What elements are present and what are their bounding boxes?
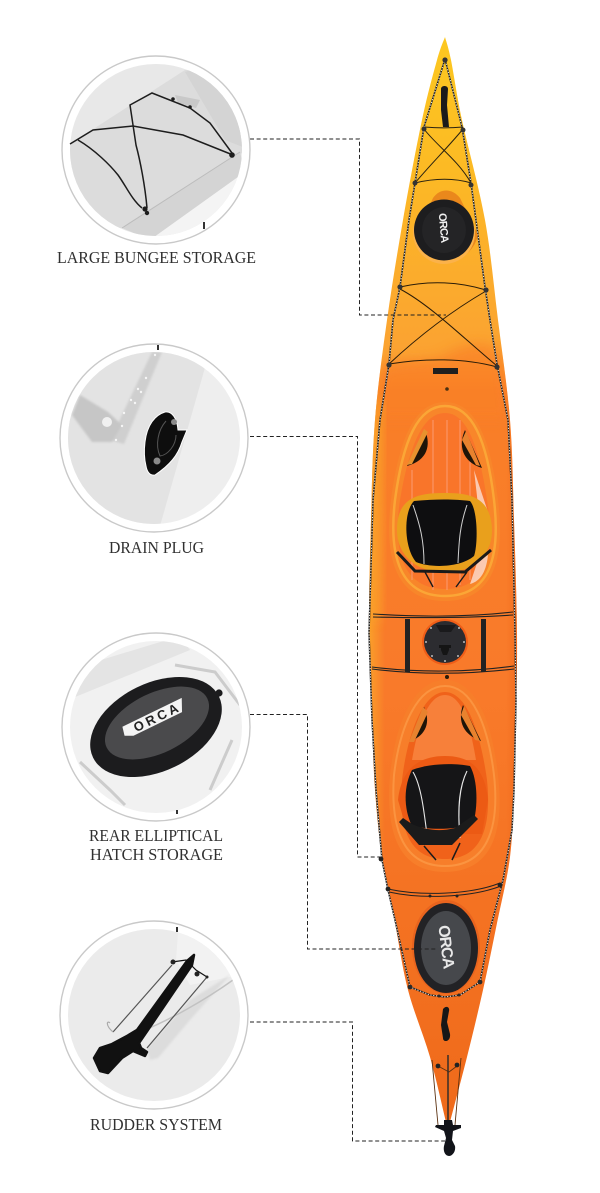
mid bungee net <box>389 283 497 367</box>
bungee fittings <box>142 97 235 215</box>
kayak <box>368 37 518 1156</box>
rudder blade <box>94 955 194 1073</box>
panel: large bungee storage <box>57 56 256 267</box>
central straps <box>405 619 486 672</box>
label: line 2: HATCH STORAGE <box>90 845 223 864</box>
infographic canvas <box>57 37 518 1156</box>
drain plug fitting <box>144 412 187 475</box>
rear hatch fittings <box>408 980 482 998</box>
black seat pad <box>406 764 476 829</box>
kayak hull <box>368 37 518 1120</box>
yellow seat shell <box>397 493 492 572</box>
dashed connector: drain plug <box>250 436 382 857</box>
rear handle <box>441 1007 450 1041</box>
rudder cables <box>107 960 207 1048</box>
mid bungee fittings <box>386 284 500 370</box>
seat piping <box>413 505 467 564</box>
rudder cables <box>432 1055 461 1125</box>
rear cockpit <box>389 680 500 872</box>
panel: rudder system <box>60 921 248 1134</box>
rudder fittings <box>170 960 208 978</box>
panel: drain plug <box>60 344 248 557</box>
seat straps <box>399 815 478 860</box>
dashed connector: rudder <box>250 1022 445 1141</box>
rear elliptical hatch <box>412 900 480 994</box>
central round hatch <box>422 619 468 665</box>
seat shell <box>398 756 488 834</box>
front bungee fittings <box>412 57 474 188</box>
circle frame <box>62 56 250 244</box>
cockpit rim <box>389 680 500 872</box>
label: LARGE BUNGEE STORAGE <box>57 248 256 267</box>
hatch lid: ORCA <box>131 700 181 735</box>
circle frame <box>60 344 248 532</box>
deck slot <box>433 368 458 374</box>
foot brace left <box>411 707 427 741</box>
seat piping <box>413 771 467 843</box>
central bungee lines <box>372 612 514 673</box>
seat straps <box>397 550 491 587</box>
rudder <box>435 1120 461 1156</box>
perimeter deck line <box>369 59 516 997</box>
dashed connector: rear hatch <box>250 714 437 949</box>
rear bungee fittings <box>379 857 502 898</box>
foot brace left <box>407 430 428 466</box>
front round hatch: ORCA <box>436 213 450 244</box>
foot brace right <box>462 430 482 468</box>
dashed connector: bungee <box>250 139 446 315</box>
black seat pad <box>406 500 477 566</box>
bungee cords <box>70 93 233 208</box>
hatch lid <box>74 657 238 797</box>
front cockpit <box>389 402 500 601</box>
cockpit interior <box>398 413 490 589</box>
label: DRAIN PLUG <box>109 538 204 557</box>
cockpit rim <box>389 402 500 601</box>
circle frame <box>60 921 248 1109</box>
circle frame <box>62 633 250 821</box>
cockpit interior <box>401 692 488 859</box>
foot brace right <box>461 705 481 741</box>
rudder cable fittings <box>436 1063 459 1068</box>
label: line 1: REAR ELLIPTICAL <box>89 826 223 845</box>
rear elliptical hatch: ORCA <box>434 924 457 970</box>
front handle <box>441 86 449 127</box>
panel: rear elliptical hatch storage <box>62 633 250 864</box>
front bungee net <box>415 127 471 183</box>
rear bungee lines <box>388 883 501 896</box>
front round hatch <box>413 190 478 264</box>
label: RUDDER SYSTEM <box>90 1115 222 1134</box>
